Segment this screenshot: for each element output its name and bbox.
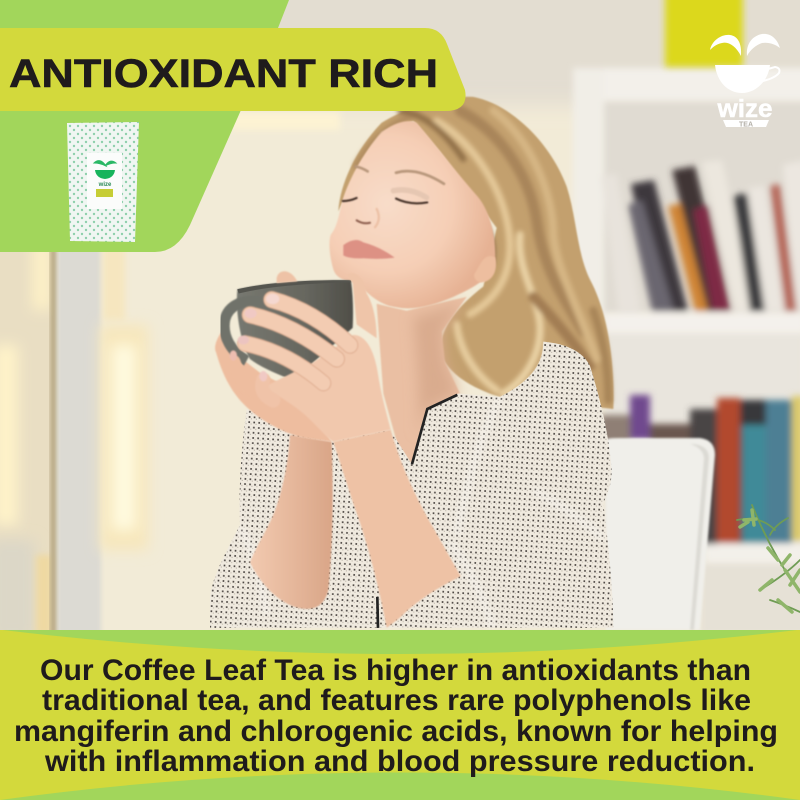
footer text: Our Coffee Leaf Tea is higher in antioxidants than: [40, 654, 751, 687]
white chair: [606, 438, 715, 630]
lips: [343, 240, 395, 259]
green panel behind product: [0, 110, 241, 252]
bookshelf: [573, 68, 800, 635]
footer bottom green arc: [0, 772, 800, 800]
brand logo: [710, 34, 780, 128]
logo wordmark: wize: [716, 95, 773, 123]
ear: [474, 256, 496, 282]
heading: ANTIOXIDANT RICH: [9, 52, 438, 96]
footer top green arc: [3, 630, 797, 654]
hands: [230, 271, 391, 442]
blouse front seam: [373, 597, 382, 628]
blouse collar trim: [412, 395, 457, 464]
bag logo: wize: [98, 182, 112, 188]
face: [329, 121, 495, 308]
product bag: [67, 122, 139, 242]
woman: [210, 97, 614, 628]
footer panel: [0, 630, 800, 800]
brand logo: TEA: [739, 122, 753, 128]
eyes and brows: [343, 167, 444, 227]
neck shadow: [413, 300, 463, 435]
left hand behind mug: [215, 328, 332, 442]
blouse folds: [240, 397, 603, 628]
photo background: room: [0, 0, 800, 640]
plant: [737, 505, 800, 612]
footer text: mangiferin and chlorogenic acids, known for helping: [14, 715, 778, 748]
footer text: [14, 654, 778, 778]
mug: [224, 280, 353, 383]
hair: [338, 97, 614, 409]
left forearm: [250, 435, 333, 609]
neck: [377, 297, 467, 464]
right forearm: [333, 430, 461, 628]
top green corner shape: [0, 0, 289, 28]
heading banner: [0, 28, 466, 111]
footer text: traditional tea, and features rare polyphenols like: [42, 684, 751, 717]
yellow object on top shelf: [665, 0, 743, 67]
blouse: [210, 342, 613, 628]
footer text: with inflammation and blood pressure reduction.: [44, 745, 755, 778]
